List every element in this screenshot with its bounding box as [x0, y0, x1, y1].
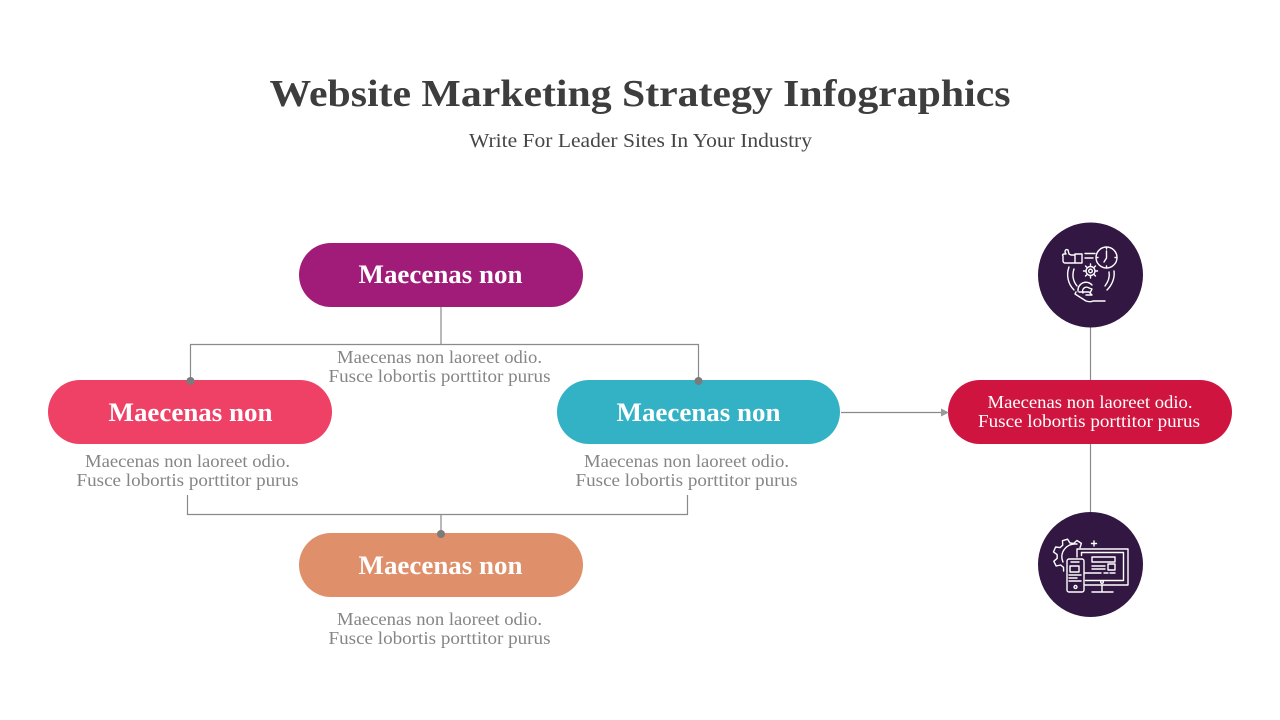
pill: top: Maecenas non — [358, 260, 523, 289]
text: bottom description: Fusce lobortis porttitor purus — [328, 628, 550, 648]
text: right description: Maecenas non laoreet odio. — [584, 451, 789, 471]
arrow: right pill to result pill — [841, 408, 949, 416]
pill: right — [557, 380, 840, 444]
text: top description — [328, 347, 550, 386]
pill: left: Maecenas non — [108, 398, 273, 427]
connector: icons to result pill — [1090, 326, 1092, 513]
monitor — [1077, 549, 1128, 592]
text: left description: Maecenas non laoreet odio. — [85, 451, 290, 471]
text: top description: Fusce lobortis porttitor purus — [328, 366, 550, 386]
arcs — [1068, 267, 1114, 290]
icon: web development — [1038, 512, 1143, 617]
icon: marketing strategy — [1038, 222, 1143, 328]
pill: top — [299, 243, 583, 307]
text: bottom description: Maecenas non laoreet odio. — [337, 609, 542, 629]
text: right description — [576, 451, 798, 490]
gear — [1084, 264, 1098, 278]
phone — [1067, 559, 1084, 592]
text: right description: Fusce lobortis porttitor purus — [576, 470, 798, 490]
text: left description: Fusce lobortis porttitor purus — [76, 470, 298, 490]
clock — [1096, 247, 1117, 268]
text: top description: Maecenas non laoreet odio. — [337, 347, 542, 367]
pill: result: Maecenas non laoreet odio. — [988, 392, 1192, 412]
page elements — [1085, 557, 1115, 573]
title: Website Marketing Strategy Infographics — [270, 73, 1010, 115]
hand with coin — [1075, 282, 1105, 302]
gear outline — [1054, 539, 1081, 571]
pill: right: Maecenas non — [616, 398, 781, 427]
pill: result — [948, 380, 1232, 444]
pill: result: Fusce lobortis porttitor purus — [978, 411, 1200, 431]
pill: bottom — [299, 533, 583, 597]
connector: top pill to left and right pills — [186, 307, 702, 385]
pill: left — [48, 380, 332, 444]
subtitle: Write For Leader Sites In Your Industry — [469, 130, 813, 152]
pill: bottom: Maecenas non — [358, 551, 523, 580]
text: left description — [76, 451, 298, 490]
dashes — [1085, 254, 1095, 258]
connector: left and right pills to bottom pill — [188, 495, 688, 538]
plus — [1092, 541, 1096, 546]
text: bottom description — [328, 609, 550, 648]
thumbs up — [1063, 250, 1082, 263]
